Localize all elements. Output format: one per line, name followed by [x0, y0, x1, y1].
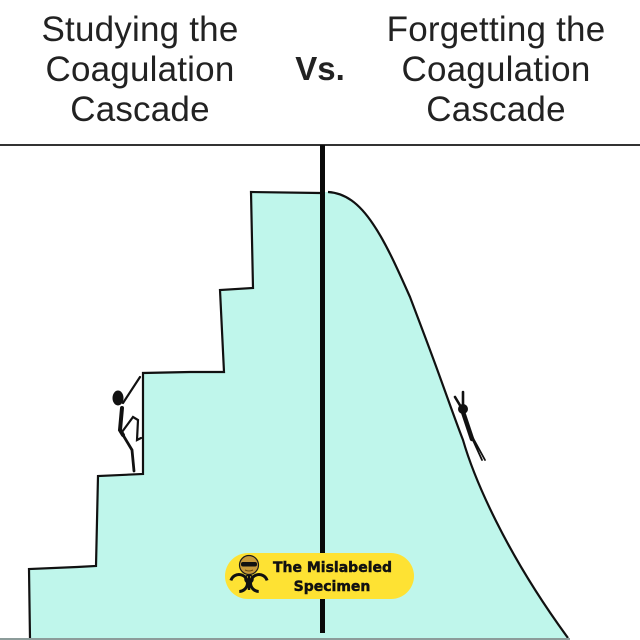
- icon: biohazard with sunglasses face: [231, 556, 267, 592]
- heading: studying the coagulation cascade: Coagulation: [45, 50, 234, 89]
- heading: versus: Vs.: [295, 50, 345, 87]
- icon: stick figure climbing: [112, 377, 141, 471]
- teal area under stairs and slope: [30, 192, 568, 640]
- center divider: [320, 145, 325, 633]
- baseline: [0, 638, 570, 640]
- outline: stairs: [29, 192, 320, 639]
- heading: studying the coagulation cascade: Cascade: [70, 90, 210, 129]
- outline: slope: [328, 192, 568, 638]
- heading: forgetting the coagulation cascade: [387, 10, 605, 129]
- heading: forgetting the coagulation cascade: Forgetting the: [387, 10, 605, 49]
- icon: stick figure sliding: [455, 392, 485, 460]
- heading: forgetting the coagulation cascade: Coagulation: [401, 50, 590, 89]
- heading: studying the coagulation cascade: Studying the: [42, 10, 238, 49]
- badge text: The Mislabeled: [273, 560, 392, 576]
- header divider line: [0, 144, 640, 146]
- heading: studying the coagulation cascade: [42, 10, 238, 129]
- badge text: Specimen: [294, 579, 370, 595]
- badge: the mislabeled specimen: [225, 553, 414, 599]
- heading: forgetting the coagulation cascade: Cascade: [426, 90, 566, 129]
